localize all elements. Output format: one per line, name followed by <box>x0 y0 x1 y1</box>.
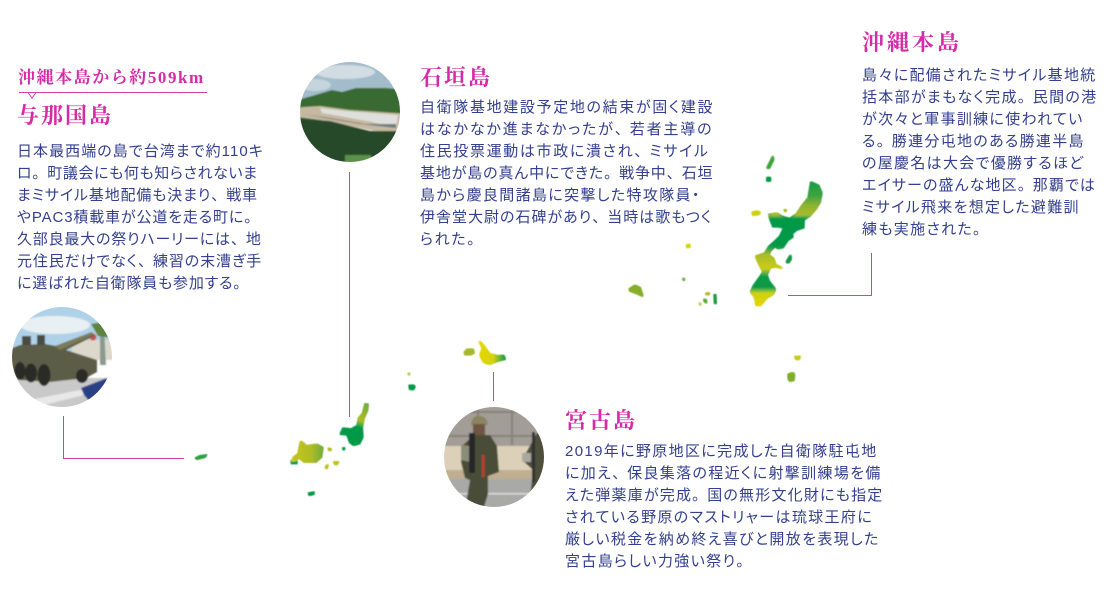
text: Ishigaki: はなかなか進まなかったが、若者主導の <box>420 121 713 138</box>
text: Okinawa main island: が次々と軍事訓練に使われてい <box>862 111 1084 128</box>
leader line: Miyako <box>492 372 494 401</box>
text: Ishigaki <box>420 99 714 248</box>
text: Ishigaki: られた。 <box>420 231 482 248</box>
text: Ishigaki: 伊舎堂大尉の石碑があり、当時は歌もつく <box>420 209 712 226</box>
heading: Miyako: 宮古島 <box>565 408 637 433</box>
leader line: Okinawa <box>788 253 872 296</box>
text: Miyako <box>565 443 883 570</box>
text: Ishigaki: 島から慶良間諸島に突撃した特攻隊員・ <box>420 187 701 204</box>
text: Okinawa main island: 括本部がまもなく完成。民間の港 <box>862 89 1097 106</box>
text: Miyako: に加え、保良集落の程近くに射撃訓練場を備 <box>565 465 882 482</box>
text: Ishigaki: 基地が島の真ん中にできた。戦争中、石垣 <box>420 165 713 182</box>
text: Okinawa main island: る。勝連分屯地のある勝連半島 <box>862 133 1085 150</box>
text: Yonaguni: まミサイル基地配備も決まり、戦車 <box>17 187 258 204</box>
text: Ishigaki: 自衛隊基地建設予定地の結束が固く建設 <box>420 99 714 116</box>
text: Miyako: されている野原のマストリャーは琉球王府に <box>565 509 873 526</box>
text: Okinawa main island <box>862 67 1097 238</box>
text: Yonaguni: 久部良最大の祭りハーリーには、地 <box>17 231 262 248</box>
text: Yonaguni <box>17 143 264 292</box>
text: Miyako: 2019年に野原地区に完成した自衛隊駐屯地 <box>565 443 878 460</box>
text: Yonaguni: 元住民だけでなく、練習の末漕ぎ手 <box>17 253 262 270</box>
leader line: Yonaguni <box>64 416 184 458</box>
map: Yonaguni island <box>195 454 207 460</box>
text: Okinawa main island: の屋慶名は大会で優勝するほど <box>862 155 1084 172</box>
text: Yonaguni: やPAC3積載車が公道を走る町に。 <box>17 209 259 226</box>
photo: soldiers on Miyako <box>444 407 544 507</box>
map: Okinawa main island group <box>629 157 822 381</box>
text: Ishigaki: 住民投票運動は市政に潰され、ミサイル <box>420 143 710 160</box>
label: distance from Okinawa main island: 沖縄本島から約509km <box>18 68 205 87</box>
photo: Ishigaki construction site <box>300 62 400 162</box>
text: Yonaguni: に選ばれた自衛隊員も参加する。 <box>17 275 248 292</box>
heading: Yonaguni: 与那国島 <box>17 103 113 128</box>
heading: Okinawa main island: 沖縄本島 <box>862 30 962 55</box>
text: Yonaguni: 日本最西端の島で台湾まで約110キ <box>17 143 264 160</box>
heading: Ishigaki: 石垣島 <box>420 65 492 90</box>
text: Yonaguni: ロ。町議会にも何も知らされないま <box>17 165 258 182</box>
leader line: Ishigaki <box>348 172 350 417</box>
text: Miyako: 厳しい税金を納め終え喜びと開放を表現した <box>565 531 880 548</box>
text: Miyako: 宮古島らしい力強い祭り。 <box>565 553 751 570</box>
map: Miyako islands <box>408 341 505 389</box>
text: Okinawa main island: 島々に配備されたミサイル基地統 <box>862 67 1097 84</box>
text: Okinawa main island: 練も実施された。 <box>862 221 988 238</box>
text: Miyako: えた弾薬庫が完成。国の無形文化財にも指定 <box>565 487 883 504</box>
text: Okinawa main island: エイサーの盛んな地区。那覇では <box>862 177 1096 194</box>
map and photo graphics <box>12 62 872 507</box>
text: Okinawa main island: ミサイル飛来を想定した避難訓 <box>862 199 1080 216</box>
map: Yaeyama islands <box>291 404 368 495</box>
photo: armored vehicle in Yonaguni <box>12 307 112 407</box>
callout rule: distance from Okinawa <box>19 92 207 98</box>
